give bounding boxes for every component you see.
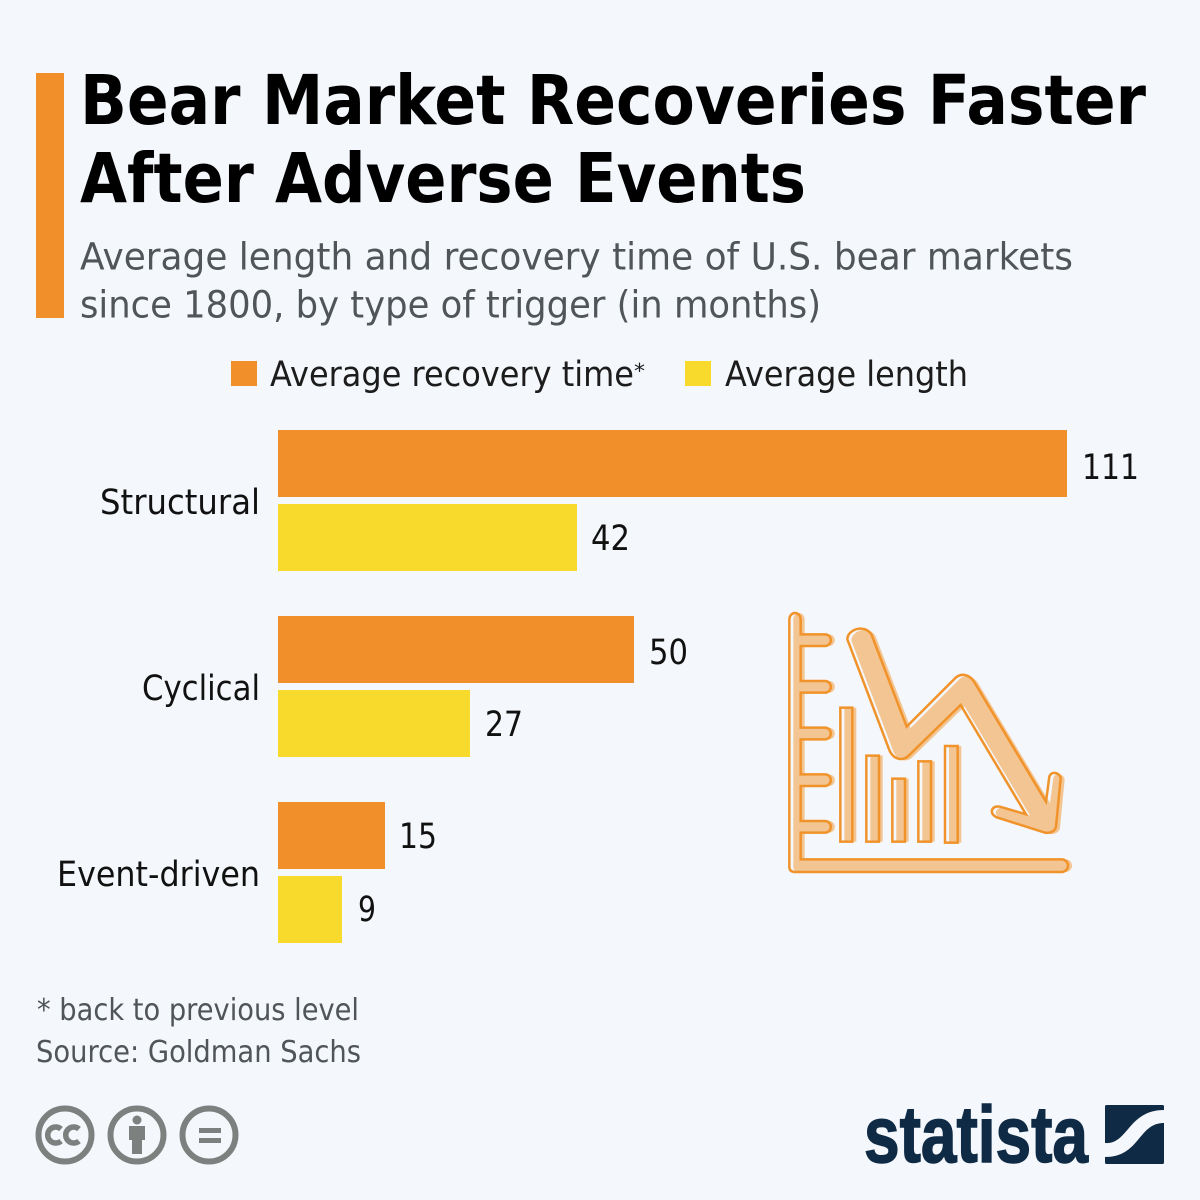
title: After Adverse Events: [80, 139, 806, 219]
legend: average recovery time: Average recovery time: [270, 355, 634, 395]
group: structural: [100, 430, 1139, 571]
group: cyclical: Cyclical: [142, 669, 260, 709]
legend: [231, 355, 968, 395]
bar chart: [57, 430, 1139, 943]
legend: average length: Average length: [725, 355, 968, 395]
header accent bar: [36, 73, 64, 318]
group: cyclical: [142, 616, 688, 757]
group: structural: 111: [1082, 448, 1139, 488]
group: cyclical: 27: [485, 705, 523, 745]
icon: declining chart: [789, 613, 1072, 872]
group: event-driven: 15: [399, 817, 437, 857]
icon: no derivatives: [182, 1108, 236, 1162]
statista logo: [864, 1090, 1164, 1179]
icon: creative commons licence: [38, 1108, 236, 1162]
group: structural: 42: [591, 519, 630, 559]
wordmark: statista: [864, 1090, 1088, 1179]
icon: attribution: [110, 1108, 164, 1162]
icon: cc: [38, 1108, 92, 1162]
footnote and source: * back to previous level: [37, 993, 359, 1028]
logo mark: [1105, 1105, 1164, 1164]
group: cyclical: 50: [649, 633, 688, 673]
group: structural: Structural: [100, 483, 260, 523]
subtitle: Average length and recovery time of U.S. bear markets: [80, 236, 1073, 278]
title: [80, 61, 1146, 219]
group: event-driven: Event-driven: [57, 855, 260, 895]
footnote and source: [36, 993, 361, 1070]
legend: average recovery time: *: [634, 359, 645, 383]
group: event-driven: [57, 802, 437, 943]
footnote and source: Source: Goldman Sachs: [36, 1035, 361, 1070]
subtitle: since 1800, by type of trigger (in months): [80, 284, 821, 326]
subtitle: [80, 236, 1073, 326]
group: event-driven: 9: [358, 890, 376, 930]
